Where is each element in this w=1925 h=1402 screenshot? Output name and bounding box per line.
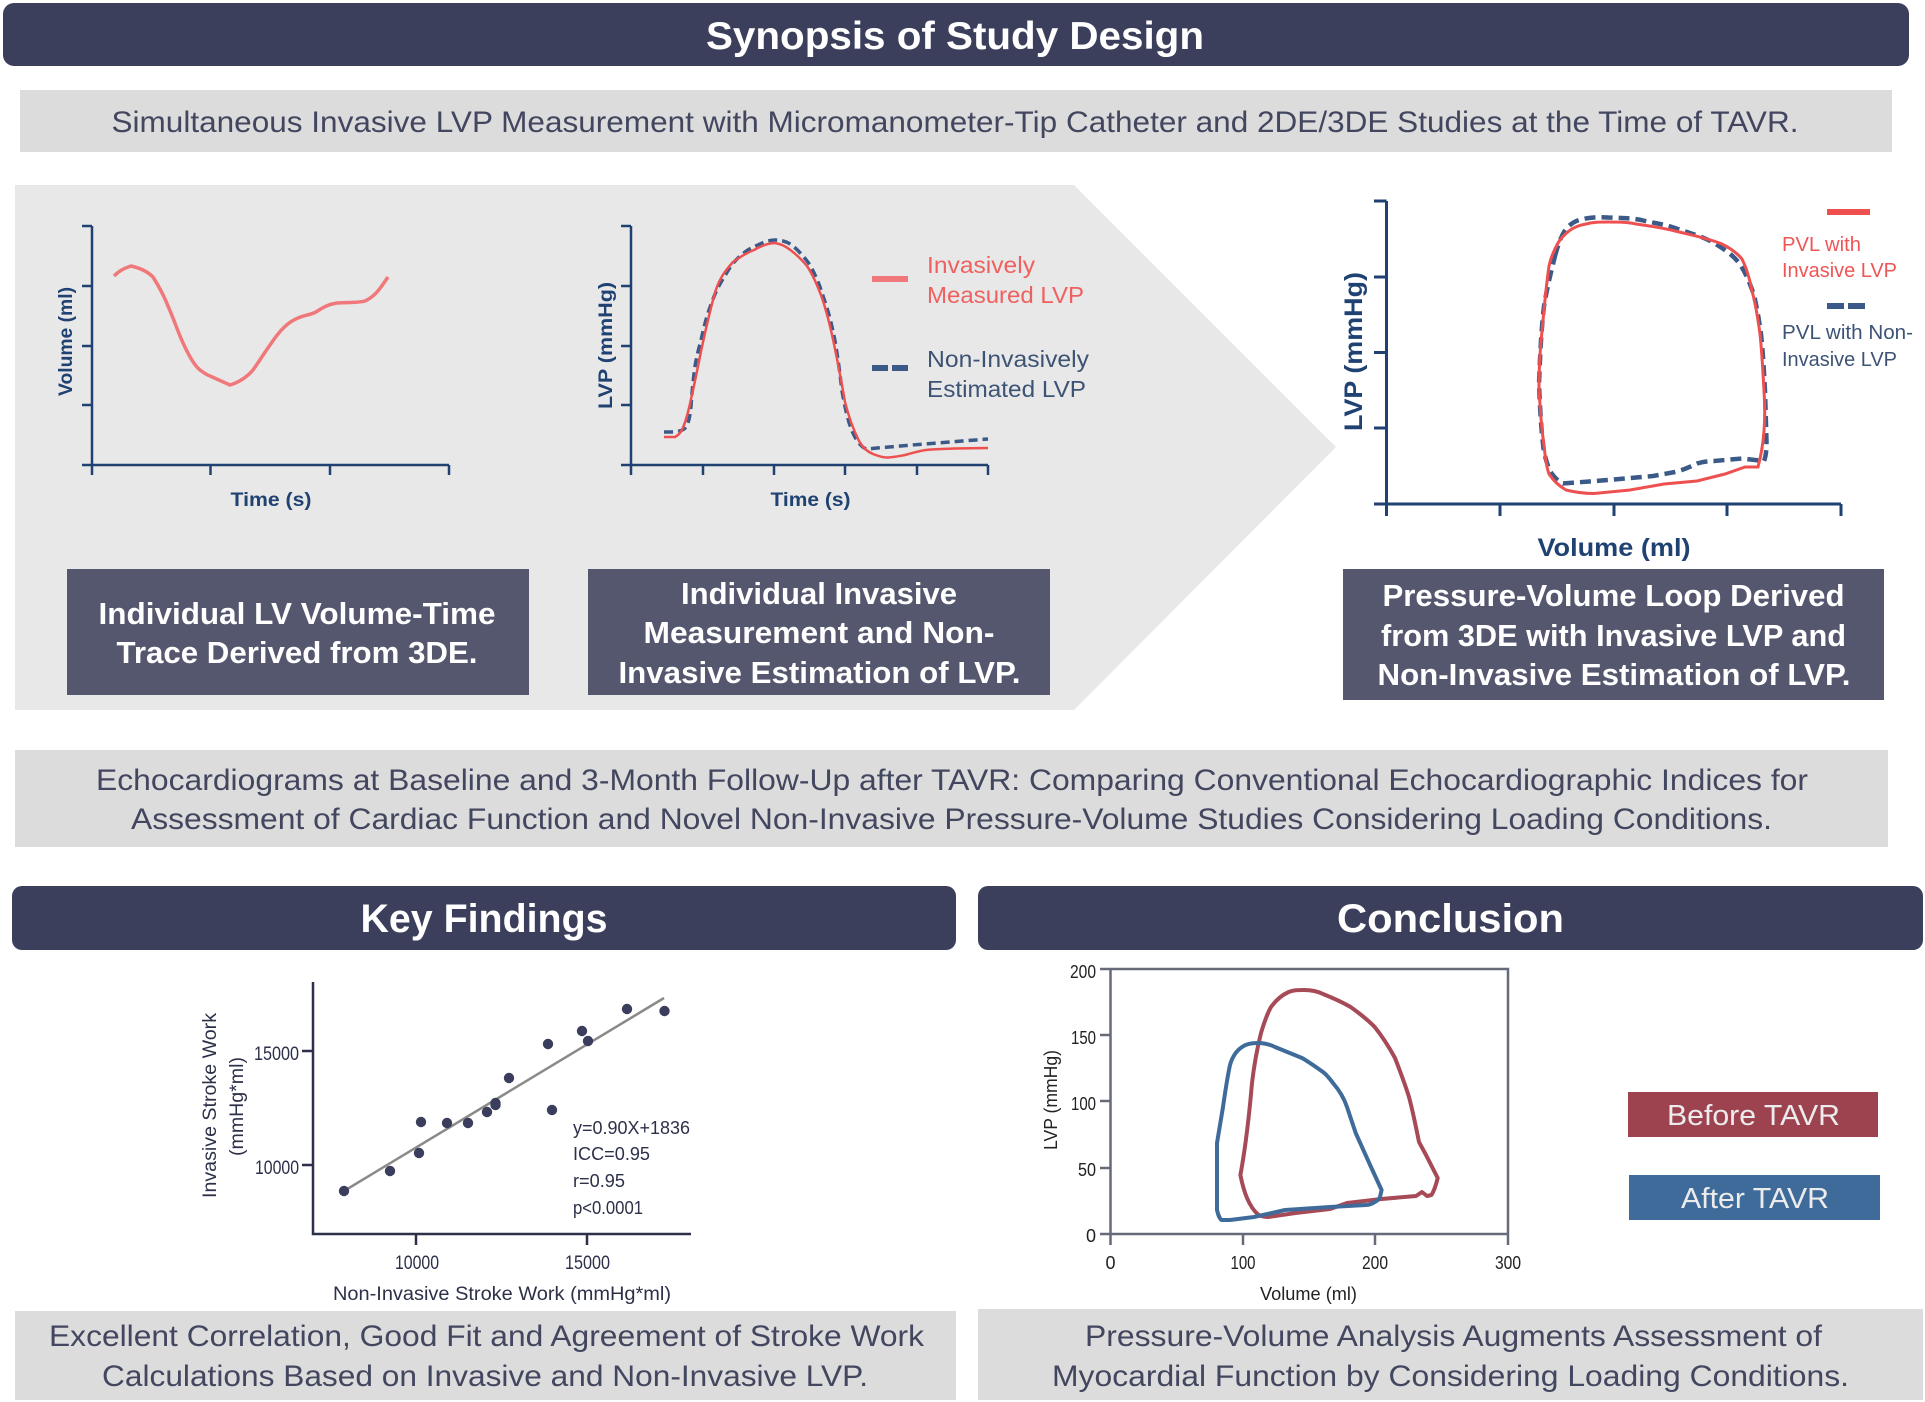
legend: LVP trace	[872, 252, 1090, 402]
key findings summary band: Excellent Correlation, Good Fit and Agreement of Stroke Work	[49, 1320, 925, 1353]
title banner: Synopsis of Study Design	[706, 15, 1204, 58]
chart: pressure-volume loops before and after TAVR: 50	[1078, 1160, 1096, 1180]
legend: before TAVR	[1628, 1092, 1878, 1137]
caption: invasive and non-invasive LVP: Measurement and Non-	[644, 615, 994, 650]
heading: conclusion	[978, 886, 1923, 950]
study description band: Simultaneous Invasive LVP Measurement with Micromanometer-Tip Catheter and 2DE/3DE Studies at the Time of TAVR.	[112, 106, 1798, 139]
chart: pressure-volume loops before and after TAVR: 100	[1230, 1253, 1256, 1273]
chart: stroke work scatter plot: 15000	[254, 1044, 299, 1065]
chart: stroke work scatter plot: Invasive Stroke Work	[200, 1012, 221, 1198]
legend: pressure-volume loop: Invasive LVP	[1782, 349, 1897, 371]
chart: invasive and non-invasive LVP trace: LVP (mmHg)	[596, 282, 617, 409]
chart: LV volume-time trace: Volume (ml)	[56, 287, 77, 396]
caption: pressure-volume loop: from 3DE with Invasive LVP and	[1381, 618, 1846, 653]
title banner	[3, 3, 1909, 66]
caption: pressure-volume loop: Non-Invasive Estimation of LVP.	[1378, 657, 1850, 692]
legend: after TAVR	[1629, 1175, 1880, 1220]
caption: LV volume-time trace	[67, 569, 529, 695]
chart: stroke work scatter plot	[200, 982, 691, 1305]
legend: pressure-volume loop: PVL with	[1782, 234, 1861, 256]
conclusion summary band: Myocardial Function by Considering Loading Conditions.	[1052, 1360, 1849, 1393]
echocardiogram description band: Echocardiograms at Baseline and 3-Month Follow-Up after TAVR: Comparing Conventional Echocardiographic Indices for	[96, 764, 1808, 797]
panel: chevron background	[15, 185, 1336, 710]
caption: invasive and non-invasive LVP	[588, 569, 1050, 695]
key findings summary band	[15, 1311, 956, 1400]
chart: stroke work scatter plot: y=0.90X+1836	[573, 1118, 690, 1138]
legend: after TAVR: After TAVR	[1681, 1183, 1829, 1215]
chart: pressure-volume loops before and after TAVR: 0	[1086, 1226, 1096, 1246]
heading: key findings: Key Findings	[360, 897, 608, 941]
heading: conclusion: Conclusion	[1337, 897, 1564, 941]
legend: LVP trace: Measured LVP	[927, 282, 1084, 308]
chart: stroke work scatter plot: 10000	[395, 1253, 439, 1274]
caption: LV volume-time trace: Trace Derived from 3DE.	[116, 635, 478, 670]
chart: pressure-volume loop: Volume (ml)	[1538, 534, 1690, 562]
chart: pressure-volume loop	[1340, 201, 1841, 562]
chart: pressure-volume loops before and after TAVR: 100	[1071, 1094, 1096, 1114]
caption: invasive and non-invasive LVP: Invasive Estimation of LVP.	[618, 655, 1020, 690]
echocardiogram description band: Assessment of Cardiac Function and Novel Non-Invasive Pressure-Volume Studies Considering Loading Conditions.	[131, 803, 1772, 836]
legend: LVP trace: Non-Invasively	[927, 346, 1090, 372]
chart: pressure-volume loops before and after TAVR: 300	[1495, 1253, 1521, 1273]
legend: LVP trace: Invasively	[927, 252, 1036, 278]
chart: stroke work scatter plot: Non-Invasive Stroke Work (mmHg*ml)	[333, 1284, 671, 1305]
chart: stroke work scatter plot: p<0.0001	[573, 1198, 643, 1218]
chart: pressure-volume loops before and after TAVR: 150	[1071, 1028, 1096, 1048]
legend: pressure-volume loop: Invasive LVP	[1782, 260, 1897, 282]
chart: pressure-volume loops before and after TAVR: 200	[1362, 1253, 1388, 1273]
legend: LVP trace: Estimated LVP	[927, 376, 1086, 402]
legend: pressure-volume loop	[1782, 209, 1913, 371]
chart: pressure-volume loops before and after TAVR	[1041, 962, 1521, 1304]
chart: pressure-volume loops before and after TAVR: LVP (mmHg)	[1041, 1050, 1061, 1150]
chart: stroke work scatter plot: r=0.95	[573, 1171, 625, 1191]
caption: pressure-volume loop: Pressure-Volume Loop Derived	[1382, 578, 1844, 613]
conclusion summary band	[978, 1309, 1923, 1400]
caption: invasive and non-invasive LVP: Individual Invasive	[681, 576, 957, 611]
data points	[339, 1004, 670, 1196]
chart: pressure-volume loop: LVP (mmHg)	[1340, 272, 1368, 431]
chart: stroke work scatter plot: (mmHg*ml)	[227, 1057, 248, 1156]
caption: LV volume-time trace: Individual LV Volume-Time	[98, 596, 495, 631]
chart: stroke work scatter plot: ICC=0.95	[573, 1144, 650, 1164]
chart: LV volume-time trace	[56, 226, 449, 511]
chart: invasive and non-invasive LVP trace: Time (s)	[770, 490, 850, 511]
heading: key findings	[12, 886, 956, 950]
chart: pressure-volume loops before and after TAVR: Volume (ml)	[1260, 1284, 1357, 1304]
legend: pressure-volume loop: PVL with Non-	[1782, 322, 1913, 344]
chart: LV volume-time trace: Time (s)	[230, 490, 312, 511]
chart: stroke work scatter plot: 10000	[255, 1158, 299, 1179]
echocardiogram description band	[15, 750, 1888, 847]
legend: before TAVR: Before TAVR	[1667, 1100, 1840, 1132]
study description band	[20, 90, 1892, 152]
chart: invasive and non-invasive LVP trace	[596, 226, 988, 511]
key findings summary band: Calculations Based on Invasive and Non-Invasive LVP.	[102, 1360, 868, 1393]
chart: pressure-volume loops before and after TAVR: 200	[1070, 962, 1096, 982]
caption: pressure-volume loop	[1343, 569, 1884, 700]
chart: pressure-volume loops before and after TAVR: 0	[1105, 1253, 1116, 1273]
chart: stroke work scatter plot: 15000	[565, 1253, 610, 1274]
conclusion summary band: Pressure-Volume Analysis Augments Assessment of	[1085, 1320, 1823, 1353]
